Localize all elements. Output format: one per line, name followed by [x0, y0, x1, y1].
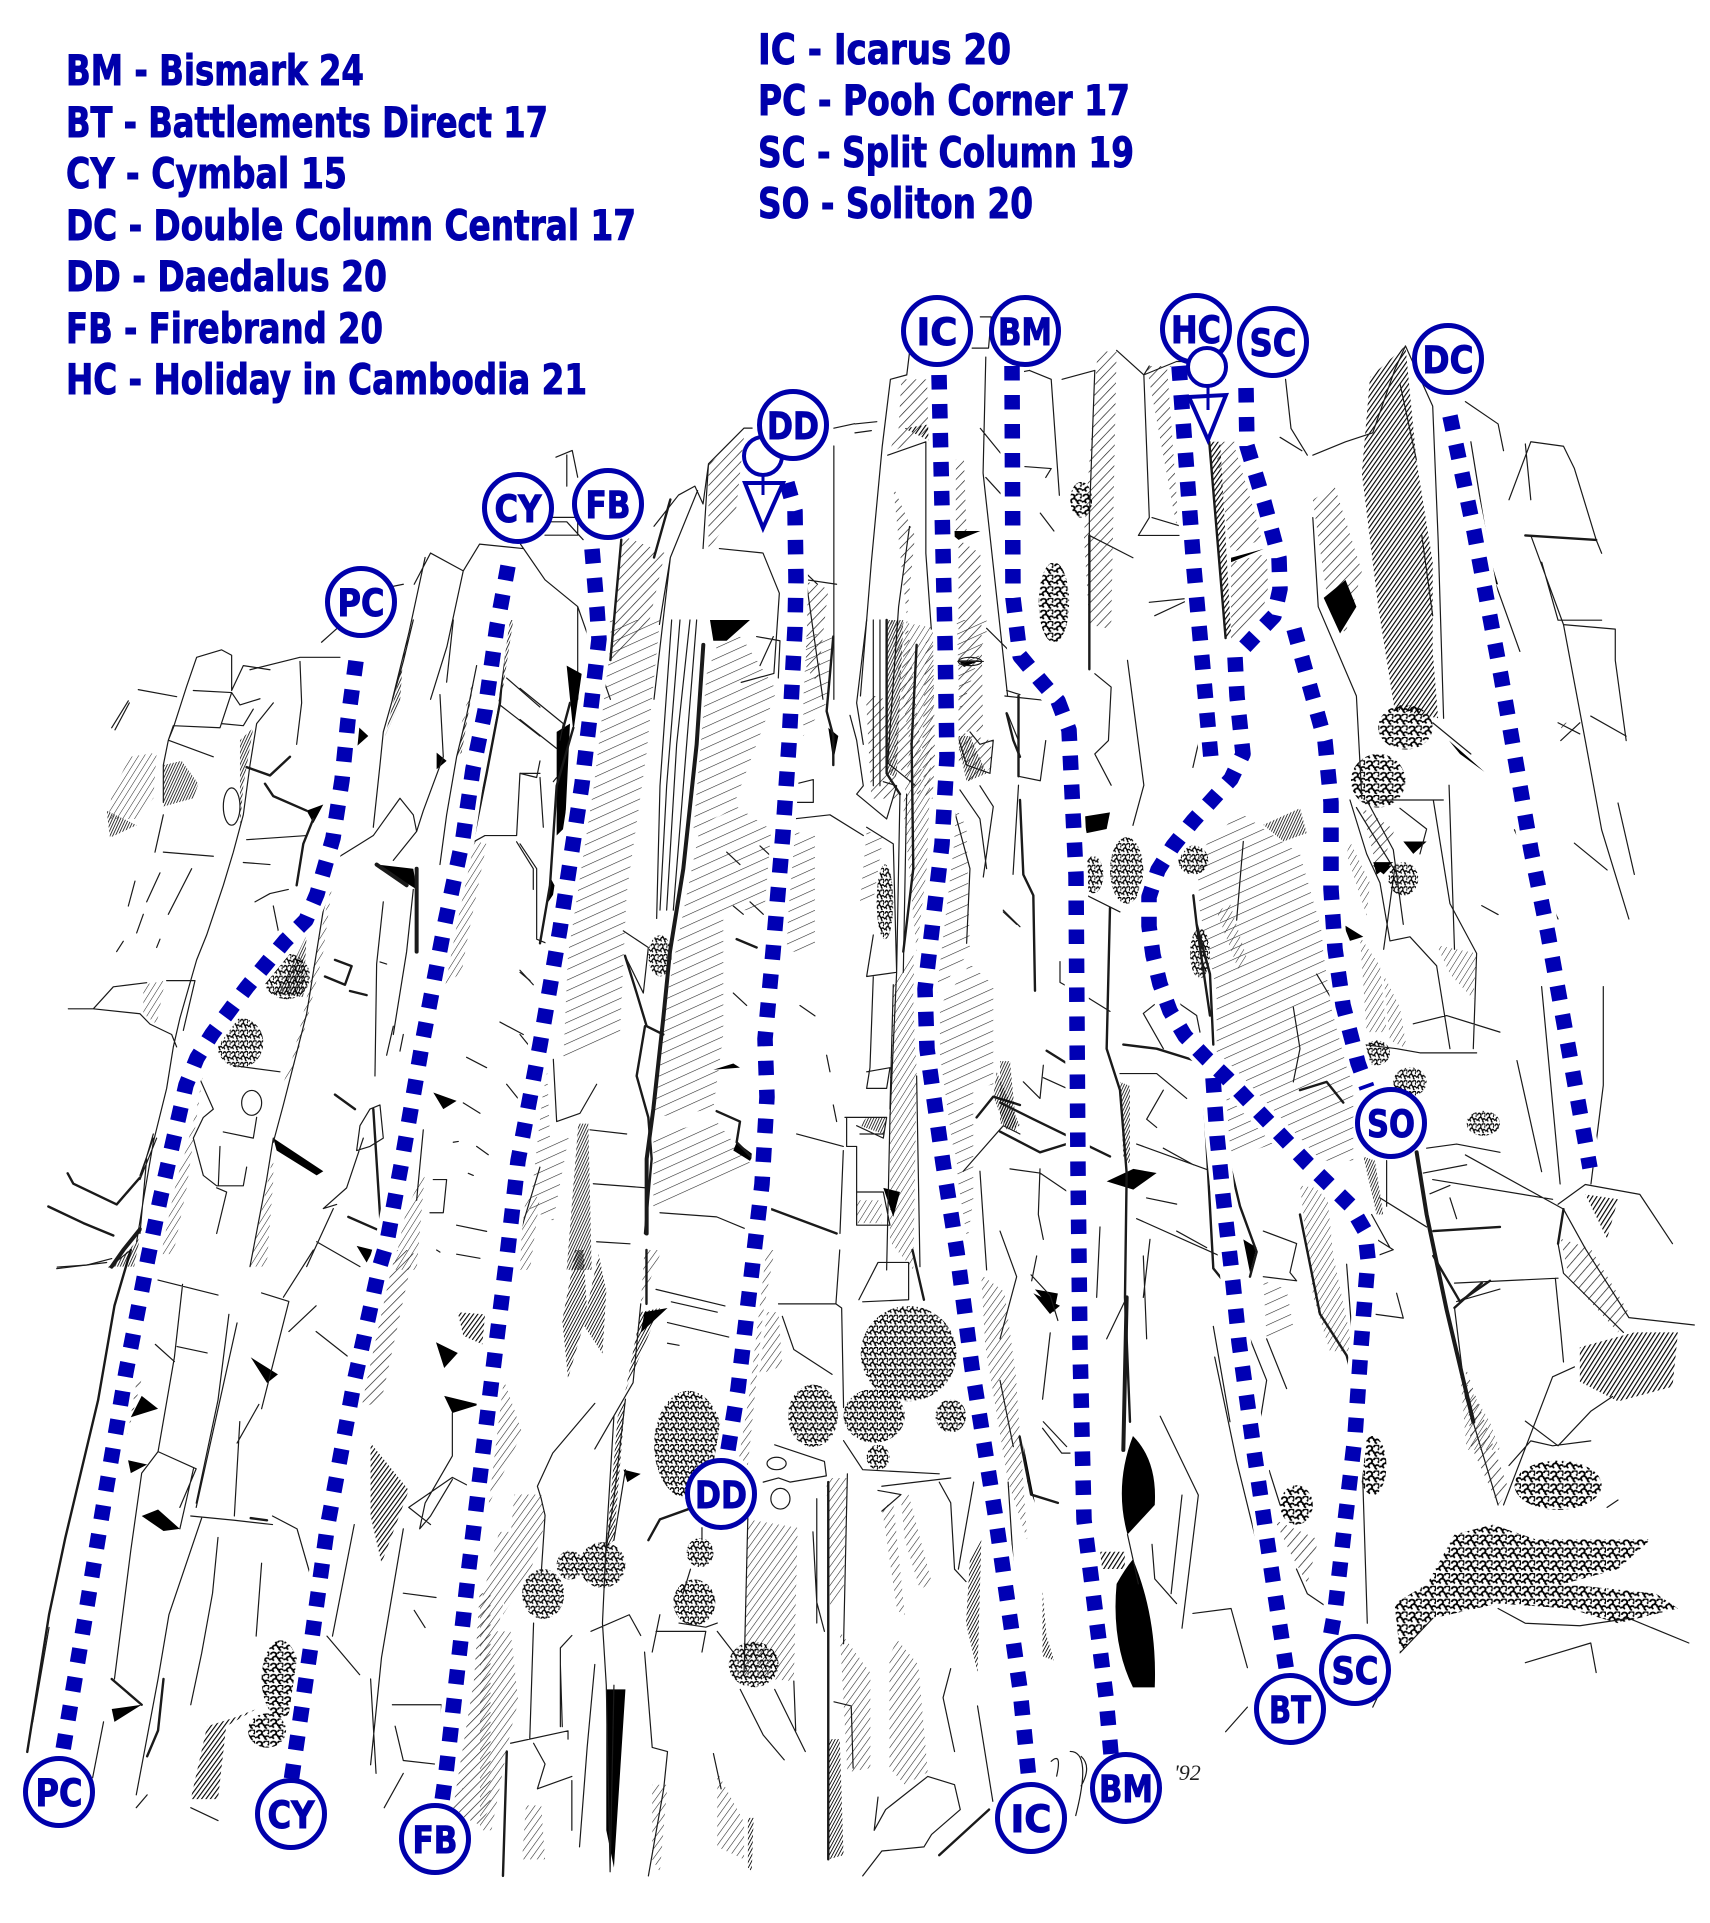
route badge: BM bottom: BM — [1099, 1768, 1153, 1811]
drawing: right middle columns — [1000, 800, 1500, 1450]
route badge: HC top — [1162, 296, 1230, 362]
route badge: FB bottom — [402, 1806, 468, 1872]
legend: right column: PC - Pooh Corner 17 — [758, 76, 1130, 125]
route badge: BT bottom — [1256, 1676, 1324, 1742]
route badge: SO: SO — [1367, 1103, 1415, 1146]
legend: right column: SO - Soliton 20 — [758, 179, 1033, 228]
route badge: PC bottom — [26, 1758, 92, 1826]
route badge: PC bottom: PC — [36, 1772, 82, 1815]
route badge: DD bottom — [688, 1460, 754, 1528]
legend: right column: SC - Split Column 19 — [758, 128, 1134, 177]
legend: left column — [66, 46, 636, 404]
route badge: IC bottom: IC — [1010, 1798, 1052, 1841]
route badge: IC top — [904, 298, 970, 364]
route badge: SO — [1358, 1090, 1424, 1156]
route badge: FB top: FB — [586, 484, 630, 527]
drawing: left middle columns — [48, 620, 540, 1270]
route badge: IC top: IC — [916, 311, 958, 354]
route line: SC Split Column — [1149, 388, 1368, 1638]
icon: HC station circle over badge — [1188, 348, 1226, 386]
route badge: PC top: PC — [338, 582, 384, 625]
route badge: BT bottom: BT — [1269, 1689, 1312, 1732]
legend: right column — [758, 25, 1134, 228]
route badge: DC top: DC — [1422, 339, 1474, 382]
route badge: BM top: BM — [998, 311, 1052, 354]
route badge: DC top — [1414, 326, 1482, 392]
route line: IC Icarus — [925, 375, 1030, 1790]
drawing: lower centre columns and bushes — [480, 1250, 1073, 1876]
route line: DD Daedalus — [725, 483, 796, 1468]
route badge: HC top: HC — [1171, 309, 1221, 352]
legend: left column: BT - Battlements Direct 17 — [66, 98, 548, 147]
route badge: DD top: DD — [767, 405, 819, 448]
drawing: lower left columns — [27, 1250, 490, 1825]
route badge: FB bottom: FB — [412, 1819, 458, 1862]
route badge: SC bottom — [1322, 1636, 1388, 1704]
route line: BM Bismark — [1012, 366, 1111, 1754]
illustration: pen drawing of columnar cliff — [27, 317, 1694, 1876]
drawing: lower right rock and vegetation — [1051, 1155, 1694, 1816]
legend: left column: FB - Firebrand 20 — [66, 304, 383, 353]
route halos — [60, 366, 1590, 1801]
drawing: far right sparse rock — [1517, 987, 1603, 1184]
legend: left column: DD - Daedalus 20 — [66, 252, 387, 301]
route line: SO Soliton — [1294, 629, 1367, 1088]
route line: DC Double Column Central — [1450, 416, 1590, 1168]
route badge: BM bottom — [1092, 1754, 1160, 1822]
route badge: CY bottom: CY — [268, 1794, 316, 1837]
route badge: SC top — [1240, 308, 1306, 376]
drawing: upper right columns — [855, 317, 1634, 949]
route badge: CY bottom — [258, 1780, 324, 1848]
legend: left column: HC - Holiday in Cambodia 21 — [66, 355, 587, 404]
route badge: CY top — [484, 474, 552, 542]
route badge: DD top — [760, 392, 826, 458]
icon: abseil station and arrow DD — [744, 437, 783, 528]
drawing: signature date: '92 — [1174, 1760, 1201, 1785]
route line: FB Firebrand — [442, 549, 599, 1801]
route badge: DD bottom: DD — [695, 1474, 747, 1517]
route line: HC Holiday in Cambodia — [1179, 366, 1212, 770]
route badge: IC bottom — [998, 1784, 1064, 1852]
legend: left column: CY - Cymbal 15 — [66, 149, 347, 198]
route badge: PC top — [328, 568, 394, 636]
legend: left column: BM - Bismark 24 — [66, 46, 364, 95]
route line: PC Pooh Corner — [60, 661, 356, 1768]
route badge: FB top — [574, 470, 642, 538]
legend: right column: IC - Icarus 20 — [758, 25, 1011, 74]
drawing: centre middle columns — [520, 620, 1020, 1270]
route badge: SC top: SC — [1250, 322, 1296, 365]
icon: abseil station arrow HC — [1189, 385, 1226, 440]
drawing: upper left summit columns — [322, 424, 855, 699]
route badge: SC bottom: SC — [1332, 1650, 1378, 1693]
route badge: BM top — [992, 298, 1058, 364]
route line: BT Battlements Direct — [1213, 1078, 1288, 1680]
route line: CY Cymbal — [291, 566, 508, 1782]
route badge: CY top: CY — [494, 488, 543, 531]
legend: left column: DC - Double Column Central 17 — [66, 201, 636, 250]
